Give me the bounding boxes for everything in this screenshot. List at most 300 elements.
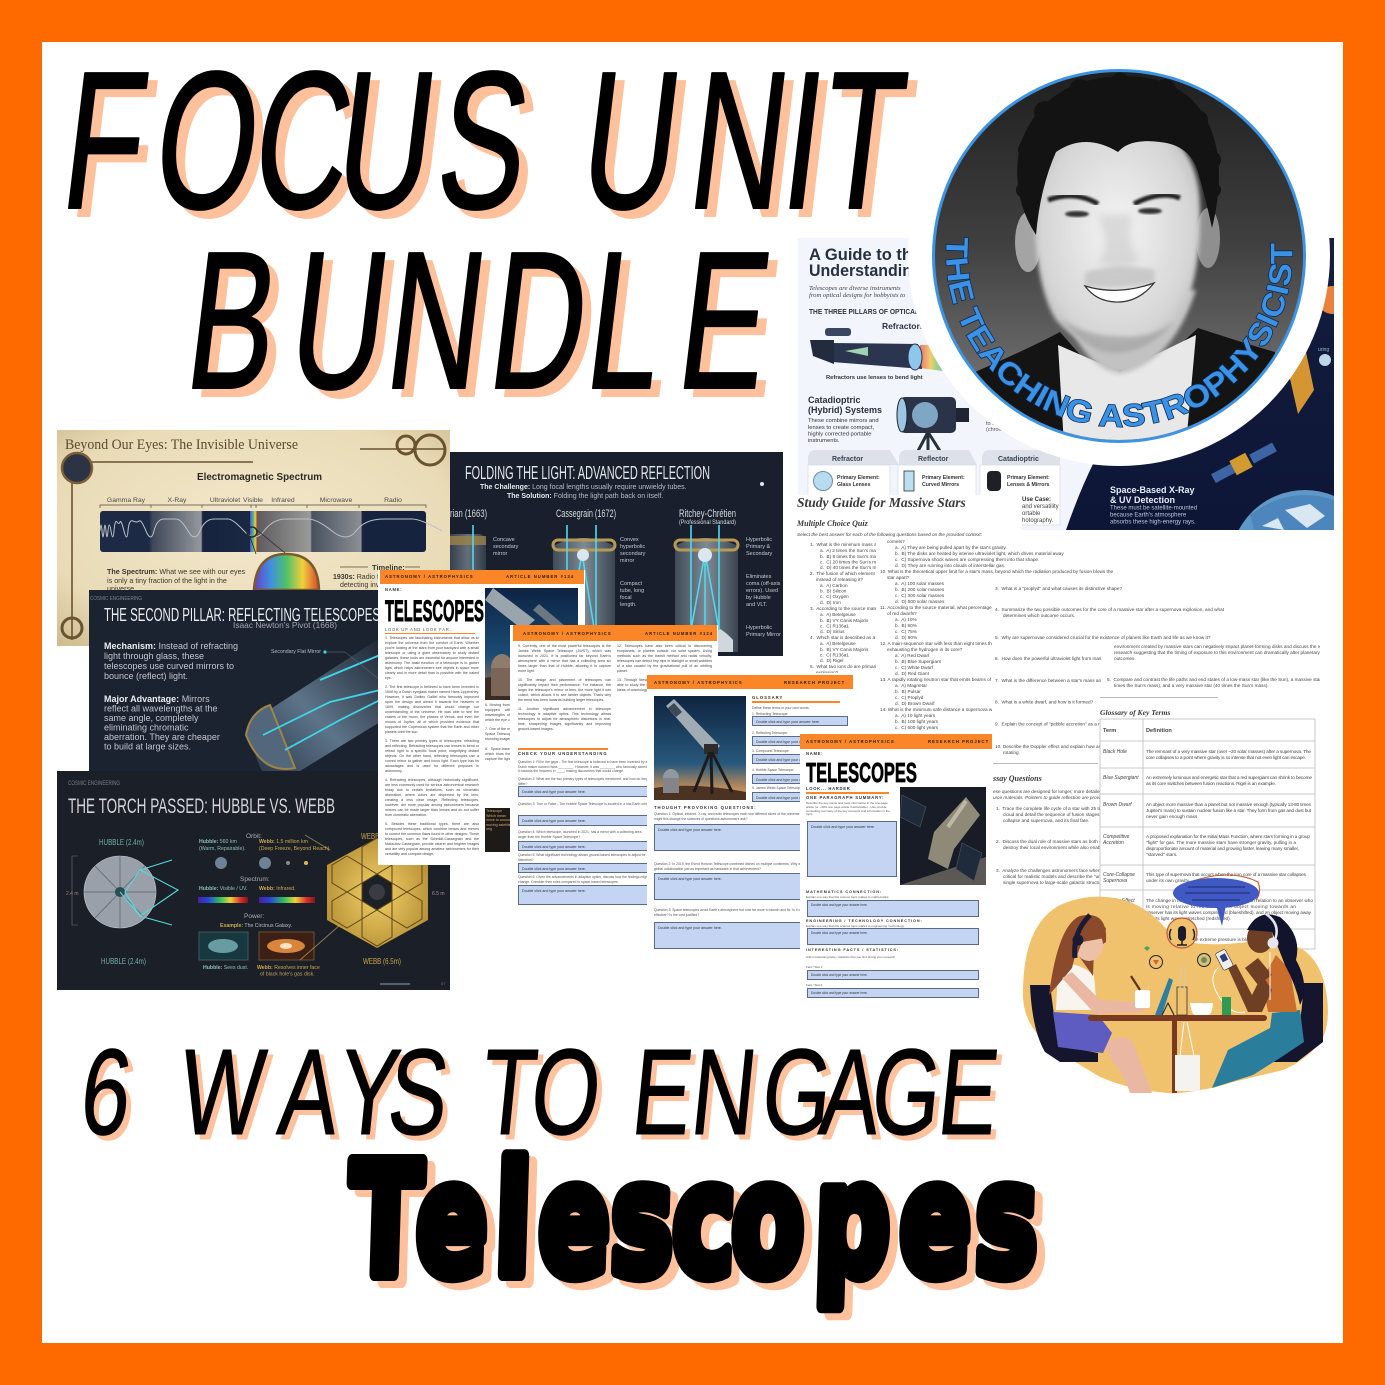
side text column: 6. Moving from the ground to space: telescopes are also equipped with instruments that detect different wavelengths of light, from radio waves to gamma rays, which the eye cannot see. [485, 703, 579, 722]
heading: 6 ways to engage telescopes: Telescopes [347, 1131, 1041, 1311]
question 5: Question 5: What significant technology allows ground-based telescopes to adjust for distortion? [518, 853, 646, 862]
short answer questions: 10. Describe the Doppler effect and explain how ast [995, 744, 1103, 749]
text block: space-based detection: because Earth's atmosphere [1110, 512, 1187, 518]
header bar [513, 625, 717, 641]
glossary table: "fight" for gas. The more massive stars have stronger gravity, pulling in a [1146, 840, 1296, 845]
icon: microphone [1167, 918, 1197, 948]
comparison tabs: hotography. [1022, 518, 1054, 524]
question 2: Question 2: In 2019, the Event Horizon Telescope combined dishes on multiple continents. Why was such global collaboration just as important as hardware in that achievement? [654, 862, 812, 871]
answer 3 [654, 922, 804, 949]
quiz column 2: c. C) 300 solar masses [895, 593, 945, 598]
answer 1: Double click and type your answer here. [658, 828, 722, 832]
orbit: Orbit: [246, 833, 262, 840]
article text: 2. The first telescope is believed to have been invented in 1608 by a Dutch eyeglass maker named Hans Lippershey. However, it was Galileo Galilei who famously improved upon the design and aimed it towards the heavens in 1609, making discoveries that would change our understanding of the universe. He was able to see the craters of the moon, the phases of Venus, and even the moons of Jupiter, all of which provided evidence that supported the Copernican system that the Earth and other planets orbit the sun. [385, 685, 479, 734]
comparison tabs: Glass Lenses [837, 482, 871, 488]
essay questions: ese questions are designed for longer, more detailed [993, 789, 1103, 794]
callouts: errors). Used [746, 588, 778, 594]
box 3 [752, 754, 848, 764]
short answer questions: 8. What is a white dwarf, and how is it formed? [995, 700, 1094, 704]
essay questions [992, 763, 1104, 885]
box 3: Double click and type your answer here. [756, 758, 820, 762]
facts heading: INTERESTING FACTS / STATISTICS: [806, 948, 899, 952]
background blob [1023, 897, 1328, 1093]
answer box 3: Double click and type your answer here. [522, 845, 586, 849]
quiz column 1: b. B) VY Canis Majoris [820, 647, 869, 652]
brows eyes [1048, 196, 1098, 204]
right chair [1257, 983, 1323, 1062]
comparison tabs: ortable [1022, 511, 1041, 517]
quiz column 2: 14. What is the minimum safe distance a supernova wou [880, 707, 998, 712]
right woman [1212, 914, 1304, 1088]
quiz column 1: 5. What two ions do are primarily res [810, 664, 888, 669]
quiz column 1: c. C) R136a1 [820, 652, 849, 658]
glossary table: This type of supernova that occurs when the iron core of a massive star collapses [1146, 872, 1307, 877]
term 1: 1. Refracting Telescope: [752, 712, 788, 716]
quiz column 1: a. A) 2 times the Sun's mass [820, 548, 881, 553]
comparison tabs: Primary Element: [837, 475, 880, 481]
hubble label top: HUBBLE (2.4m) [99, 837, 144, 847]
spectrum bar [100, 505, 442, 580]
header bar: ASTRONOMY / ASTROPHYSICS [806, 738, 895, 744]
captions: Webb: Resolves inner face [257, 965, 320, 971]
article column 1: 10. The design and placement of telescopes can significantly impact their performance. For instance, the larger the telescope's mirror or lens, the more light it can collect, which allows it to see fainter objects. That's why the trend has been towards building larger telescopes. [518, 678, 611, 702]
term 3: 3. Compound Telescope: [752, 749, 789, 753]
quiz column 2: c. C) Proplyd [895, 695, 924, 700]
comparison tabs: Lenses & Mirrors [1007, 482, 1049, 488]
text block: aberration. They are cheaper [104, 732, 220, 742]
essay questions: destroy their local environment while also enabli [1003, 845, 1103, 850]
dark callout box: Telescope Which mean move to around moving satellite orig [486, 809, 511, 831]
quiz column 1: d. D) Sirius [820, 629, 845, 634]
subtitle: LOOK UP AND LOOK FAR... [385, 627, 455, 632]
jacket [975, 328, 1275, 450]
power: Power: [244, 913, 264, 920]
quiz column 1: d. D) Iron [820, 600, 841, 605]
quiz column 1: b. B) Silicon [820, 588, 847, 594]
glossary table: never gain enough mass. [1146, 814, 1199, 819]
icon: catadioptric telescope [897, 397, 969, 451]
engineering box [807, 928, 979, 945]
text block: catadioptric [808, 395, 882, 444]
text block: bounce (reflect) light. [104, 671, 188, 681]
comparison tabs: Reflector [918, 456, 949, 463]
text block: space-based detection [1110, 485, 1197, 526]
photo: telescope at night [654, 696, 746, 800]
illustration: satellite and earth [1211, 352, 1380, 640]
subheading: Isaac Newton's Pivot (1668) [233, 620, 337, 630]
text block: guide heading: A Guide to th [809, 245, 912, 264]
header bar [380, 570, 584, 584]
essay questions: ssay Questions [992, 774, 1042, 783]
page progress: 07 [441, 981, 446, 986]
timeline [333, 563, 420, 589]
quiz column 2: a. A) Red Dwarf [895, 653, 930, 658]
quiz column 2: a. A) They are being pulled apart by the star's gravity. [895, 545, 1007, 550]
text block: catadioptric: These combine mirrors and [808, 418, 879, 424]
glossary table: An object more massive than a planet but not massive enough (typically 13-80 times [1146, 802, 1312, 807]
callouts: Hyperbolic [746, 537, 772, 543]
subheading: The Challenge: Long focal lengths usually require unwieldy tubes. [480, 484, 687, 491]
fact 1 label: Fact / Stat 1: [806, 965, 823, 969]
text: the teaching astrophysicist: THE TEACHING ASTROPHYSICIST [945, 237, 1293, 428]
captions: Hubble: Sees dust. [203, 965, 248, 971]
worksheet 4: research project summary [800, 733, 992, 1005]
essay questions: collapse and supernova, and its final fate. [1003, 818, 1089, 823]
text block: catadioptric: instruments. [808, 438, 840, 444]
timeline: detecting invisible [340, 582, 395, 589]
captions [203, 965, 320, 978]
spectrum labels [107, 497, 402, 504]
worksheet 3: research project glossary [647, 673, 853, 958]
glossary table: observer has its light waves compressed (blueshifted), and an object moving away [1146, 910, 1312, 915]
slide: torch passed [57, 771, 450, 990]
text block: guide heading [809, 245, 925, 331]
smile [1085, 283, 1154, 302]
article text [385, 636, 479, 856]
comparison tabs: and versatility [1022, 504, 1059, 510]
article text: 1. Telescopes are fascinating instruments that allow us to explore the universe from the comfort of Earth. Whether you're looking at the stars from your backyard with a small telescope or using a giant observatory to study distant galaxies, these tools are essential for anyone interested in astronomy. The basic function of a telescope is to gather light, which helps astronomers see objects in space more clearly and in more detail than is possible with the naked eye. [385, 636, 479, 680]
text block: catadioptric: highly corrected portable [808, 432, 871, 438]
photo: space telescope [900, 787, 986, 885]
orbit: Hubble: 560 km [199, 839, 237, 845]
left woman [1049, 915, 1152, 1093]
header bar: RESEARCH PROJECT [928, 738, 989, 744]
callouts: hyperbolic [620, 544, 645, 550]
essay questions: 3. Analyze the challenges astronomers face when [996, 868, 1101, 873]
quiz column 2: 13. A rapidly rotating neutron star that emits beams of X [880, 677, 996, 682]
article text: 4. Refracting telescopes, although historically significant, are less commonly used for serious astronomical research today due to certain limitations, such as chromatic aberration, where colors are dispersed by the lens, creating a less clear image. Reflecting telescopes, however, are more popular among astronomers because mirrors can be made larger than lenses and do not suffer from chromatic aberration. [385, 778, 479, 817]
callouts: and VLT. [746, 602, 768, 608]
subtitle: LOOK... HARDER [806, 786, 850, 791]
column headings: (Professional Standard) [679, 520, 736, 526]
photo: telescope at dusk [485, 588, 578, 700]
answer box 4 [518, 863, 653, 873]
text block: space-based detection: absorbs these high-energy rays. [1110, 520, 1196, 526]
heading: 6 ways to engage telescopes: Telescopes [355, 1138, 1049, 1318]
quiz column 2: 11. According to the source material, what percentage o [880, 605, 996, 610]
infographic: guide to telescopes [798, 238, 1334, 530]
glossary table: The change in frequency or wavelength of a wave in relation to an observer who [1146, 898, 1313, 903]
quiz column 2: d. D) They are running into clouds of interstellar gas. [895, 563, 1005, 568]
quiz column 2: exhausting the hydrogen in its core? [887, 647, 963, 652]
orbit: (Deep Freeze, Beyond Reach). [259, 846, 331, 852]
title: focus unit bundle: BUNDLE [177, 212, 781, 430]
summary box [807, 821, 897, 877]
mask between columns [876, 538, 1322, 738]
quiz column 2: b. B) 50% [895, 623, 917, 628]
header bar [800, 734, 992, 748]
term 4: 4. Hubble Space Telescope: [752, 768, 794, 772]
quiz column 2: a. A) Magnetar [895, 683, 927, 688]
term 2: 2. Reflecting Telescope: [752, 730, 788, 734]
box 5: Double click and type your answer here. [756, 796, 820, 800]
header bar [647, 675, 853, 689]
quiz column 2: d. D) Red Giant [895, 671, 930, 676]
column headings: Cassegrain (1672) [556, 508, 616, 520]
spectrum labels: Radio [384, 497, 402, 504]
callouts: focal [620, 595, 632, 601]
question 4: Question 4: Which telescope, launched in 2021, has a mirror with a collecting area larger than the Hubble Space Telescope? [518, 830, 641, 839]
summary instructions: Describe the key points and most information in the one-page article (or ~30% one page article if achievable) - Use provide compelling summary of the key concepts and information in the topic. [806, 801, 890, 816]
glossary table: Definition [1146, 728, 1172, 734]
callouts: Primary Mirror [746, 632, 781, 638]
glossary table: An extremely luminous and energetic star that a red supergiant can shrink to become [1146, 775, 1312, 780]
article column 1: 9. Currently, one of the most powerful telescopes is the James Webb Space Telescope (JWST), which was launched in 2021. It is positioned far beyond Earth's atmosphere with a mirror that has a collecting area six times larger than that of Hubble, allowing it to capture more light. [518, 644, 611, 673]
question five line: 5. Why are supernovae considered crucial for the existence of planets like Earth and life as we know it? [995, 635, 1211, 640]
glossary table: The remnant of a very massive star (over ~20 solar masses) after a supernova. The [1146, 749, 1311, 754]
heading: 6 ways to engage telescopes [75, 1023, 1049, 1320]
essay questions: single supernova to large-scale galactic structu [1003, 880, 1101, 885]
thought provoking heading: THOUGHT PROVOKING QUESTIONS: [654, 805, 757, 810]
infographic: guide to telescopes: to c [986, 421, 995, 427]
short answer questions: rotating. [1003, 750, 1020, 755]
short answer questions: 7. What is the difference between a star's mass an [995, 678, 1101, 683]
header bar: ASTRONOMY / ASTROPHYSICS [523, 630, 612, 636]
glossary table: Term [1103, 728, 1116, 734]
engineering heading: ENGINEERING / TECHNOLOGY CONNECTION: [806, 919, 923, 923]
glossary table: under its own gravity. [1146, 878, 1190, 883]
article column 1 [518, 644, 611, 731]
orbit: Webb: 1.5 million km [259, 839, 308, 845]
callouts: mirror [620, 558, 635, 564]
quiz column 1: b. B) 8 times the Sun's mass [820, 554, 881, 559]
header bar: ARTICLE NUMBER #134 [506, 574, 574, 579]
answer box 5: Double click and type your answer here. [522, 889, 586, 893]
quiz column 2: d. D) 90% [895, 635, 917, 640]
label: COSMIC ENGINEERING [68, 781, 120, 787]
callouts: secondary [493, 544, 519, 550]
callouts: Convex [620, 537, 639, 543]
box 2: Double click and type your answer here. [756, 740, 820, 744]
heading: glossary: Glossary of Key Terms [1100, 708, 1170, 717]
summary box: Double click and type your answer here. [811, 825, 875, 829]
answer box 5 [518, 885, 653, 905]
comparison tabs: Refractor [832, 456, 863, 463]
icons: reactions [1144, 946, 1210, 968]
text: the spectrum [107, 567, 246, 593]
study guide page [796, 495, 1320, 950]
fact 1 box: Double click and type your answer here. [811, 973, 868, 977]
box 2 [752, 736, 848, 746]
text block: Mechanism: Instead of refracting [104, 641, 238, 651]
answer 3: Double click and type your answer here. [658, 926, 722, 930]
answer 2: Double click and type your answer here. [658, 877, 722, 881]
column headings: rian (1663) [450, 508, 487, 520]
text block [104, 641, 238, 752]
power [220, 913, 292, 929]
text: the spectrum: universe. [107, 584, 136, 593]
short answer questions: 6. How does the powerful ultraviolet light from mas [995, 656, 1102, 661]
galaxy images [199, 932, 314, 960]
quiz column 2: b. B) 200 solar masses [895, 587, 945, 592]
diagram: webb mirror: 6.5 m [432, 891, 445, 897]
slide: second pillar [89, 590, 380, 771]
math instruction: Explain one way that this science topic relates to mathematics. [806, 895, 889, 899]
title: TELESCOPES [385, 595, 484, 628]
webb label top: WEBB (6.5m) [361, 832, 399, 841]
mask for right columns [992, 586, 1322, 806]
text block: space-based detection: These must be satellite-mounted [1110, 506, 1197, 512]
quiz column 1: instead of releasing it? [816, 577, 863, 582]
quiz column 1: explosion? [816, 670, 839, 675]
callouts: Concave [493, 537, 515, 543]
essay questions right column: research suggesting that the timing of exposure to this environment can dramatically alter planetary [1114, 650, 1320, 655]
glossary table [1100, 719, 1315, 949]
quiz column 2: a. A) 10 light years [895, 713, 936, 718]
spectrum labels: Gamma Ray [107, 497, 146, 504]
glossary table: has its light waves stretched (redshifted). [1146, 916, 1231, 921]
question 2 and answer box: Question 2: What are the two primary types of telescopes mentioned, and how do they differ? [518, 777, 648, 786]
callouts: mirror [493, 551, 508, 557]
slide: folding the light [450, 452, 783, 656]
header bar: ARTICLE NUMBER #124 [645, 630, 713, 636]
accent rule [806, 792, 889, 794]
math box: Double click and type your answer here. [811, 903, 868, 907]
spectrum [198, 876, 315, 903]
timeline: Timeline: [372, 563, 405, 572]
quiz column 1: d. D) Rigel [820, 658, 843, 663]
question 3: Question 3: True or False - The Hubble Space Telescope is located in a low-Earth orbit. [518, 802, 649, 806]
short answer questions: 9. Explain the concept of "pebble accretion" as a n [995, 722, 1101, 726]
quiz column 1: a. A) Betelgeuse [820, 612, 856, 617]
callouts: by Hubble [746, 595, 771, 601]
text block: space-based detection: Space-Based X-Ray [1110, 485, 1195, 495]
quiz column 1: 4. Which star is described as a red [810, 635, 884, 640]
title: focus unit bundle [53, 32, 925, 430]
quiz column 2: b. B) Pulsar [895, 689, 921, 694]
side text column: 8. Space-based telescopes avoid Earth's atmosphere, which blurs the images seen from the ground, and they capture the light that does not reach the surface. [485, 747, 579, 761]
quiz column 1: c. C) R136a1 [820, 624, 849, 628]
short answer questions: determines which outcome occurs. [1003, 613, 1075, 618]
title: TELESCOPES [806, 757, 917, 788]
diagrams [450, 525, 738, 652]
column headings: Ritchey-Chrétien [679, 508, 736, 520]
quiz column 2: star apart? [887, 575, 910, 580]
glossary table: Brown Dwarf [1103, 802, 1132, 808]
spectrum labels: Visible [243, 497, 263, 504]
answer box 2 [518, 815, 653, 826]
essay questions right column: times the Sun's mass), and a very massive star (40 times the Sun's mass). [1114, 683, 1269, 688]
heading: Beyond Our Eyes: The Invisible Universe [65, 437, 298, 453]
essay questions: urce materials. Pointers to guide reflection are provid [993, 795, 1103, 800]
box 1 [752, 716, 848, 726]
article column 2: 12. Telescopes have also been critical in discovering exoplanets, or planets outside our solar system. Using methods such as the transit method and radial velocity, telescopes can detect tiny dips in starlight or small wobbles of a star caused by the gravitational pull of an orbiting planet. [617, 644, 712, 673]
questions: Question 1: Fill in the gaps - The first telescope is believed to have been invented by a Dutch maker named Hans ________. However, it was ________ who famously aimed it towards the heavens in ____, making discoveries that would change [518, 760, 647, 773]
text block: catadioptric: lenses to create compact, [808, 425, 874, 431]
glossary table: disproportionate amount of material and growing faster, leaving many smaller, [1146, 846, 1299, 851]
hair [1016, 73, 1221, 235]
orbit: (Warm, Repairable). [199, 846, 246, 852]
summary heading: ONE PARAGRAPH SUMMARY: [806, 795, 884, 800]
glossary table: as its core switches between fusion reactions. Rigel is an example. [1146, 781, 1276, 786]
quiz column 2: c. C) White Dwarf [895, 665, 934, 670]
illustration: two women listening to a podcast [1023, 874, 1328, 1094]
quiz column 2: of red dwarfs? [887, 611, 917, 616]
short answer questions: 4. Summarize the two possible outcomes for the core of a massive star after a supernova explosion, and what [995, 607, 1225, 612]
quiz column 2: comets? [887, 539, 905, 544]
section heading: CHECK YOUR UNDERSTANDING [518, 751, 608, 756]
glossary table: A proposed explanation for the Initial Mass Function, where stars forming in a group [1146, 834, 1310, 839]
text block: reflect all wavelengths at the [104, 704, 218, 714]
icon: refractor telescope [810, 328, 950, 372]
glossary table: Core-Collapse [1103, 872, 1135, 878]
power: Example: The Circinus Galaxy. [220, 923, 292, 929]
glossary table: core collapses to a point where gravity is so intense that not even light can escape. [1146, 755, 1306, 760]
worksheet 2: check your understanding [510, 625, 718, 910]
comparison tabs: Use Case: [1022, 497, 1051, 503]
fact 2 label: Fact / Stat 2: [806, 983, 823, 987]
glossary table: "starved" stars. [1146, 852, 1177, 857]
caption: refractors: Refractors use lenses to bend light [826, 375, 923, 381]
text block: telescopes use curved mirrors to [104, 661, 234, 671]
callouts: Primary & [746, 544, 770, 550]
quiz column 1 [810, 542, 888, 675]
text: the spectrum: is only a tiny fraction of the light in the [107, 576, 227, 585]
glossary heading: GLOSSARY [752, 695, 783, 700]
callouts: coma (off-axis [746, 581, 781, 587]
heading: multiple choice: Multiple Choice Quiz [796, 519, 869, 528]
text block: to build at large sizes. [104, 742, 191, 752]
box 5 [752, 792, 848, 802]
glossary instruction: Define these terms in your own words. [752, 706, 810, 710]
slide: beyond our eyes [57, 430, 450, 646]
portrait badge [908, 69, 1330, 466]
text: the spectrum: The Spectrum: What we see with our eyes [107, 567, 246, 576]
glossary table: A massive star where the extreme pressure is blown from the [1146, 937, 1273, 942]
accent rule [752, 701, 840, 702]
quiz column 1: a. A) Betelgeuse [820, 641, 856, 646]
fact 2 box: Double click and type your answer here. [811, 991, 868, 995]
quiz column 1: a. A) Carbon [820, 583, 848, 588]
text block: guide heading: Telescopes are diverse instruments [809, 285, 901, 292]
dark callout box [485, 808, 512, 852]
quiz column 2: c. C) 75% [895, 629, 917, 634]
question 1: Question 1: Optical, infrared, X-ray, and radio telescopes each see different slices of the universe. How might this change the sciences of questions astronomers ask? [654, 812, 808, 821]
essay questions: cloud and detail the sequence of fusion stages a [1003, 812, 1104, 817]
glossary table: Doppler Effect [1103, 898, 1135, 904]
spectrum labels: Microwave [320, 497, 352, 504]
text block: same angle, completely [104, 713, 199, 723]
callouts: Eliminates [746, 574, 772, 580]
accent rule [518, 748, 608, 750]
fact 2 box [807, 988, 979, 998]
callouts: length. [620, 602, 637, 608]
comparison tabs: Curved Mirrors [922, 482, 959, 488]
captions: of black hole's gas disk. [260, 972, 315, 978]
engineering instruction: Explain one way that this science topic relates to engineering / technology. [806, 924, 905, 928]
glossary table: Blue Supergiant [1103, 775, 1139, 781]
glossary table: Accretion [1102, 840, 1124, 846]
comparison tabs [808, 450, 1060, 525]
quiz column 2: 12. A main-sequence star with less than eight times the [880, 641, 995, 646]
text block: light through glass, these [104, 651, 204, 661]
subheading: The Solution: Folding the light path back on itself. [507, 493, 663, 500]
hubble label bottom: HUBBLE (2.4m) [101, 956, 146, 966]
text block: guide heading: Refractors [882, 321, 925, 331]
column headings [450, 508, 736, 526]
text block: guide heading: from optical designs for hobbyists to [809, 292, 906, 299]
quiz column 1: b. B) VY Canis Majoris [820, 618, 869, 623]
article column 1: 11. Another significant advancement in telescope technology is adaptive optics. This technology allows telescopes to adjust for atmospheric distortions in real-time, sharpening images significantly and improving ground-based images. [518, 707, 611, 731]
quiz column 2: c. C) Supernova shock waves are compressing them into that shape. [895, 557, 1039, 562]
article column 2: 13. Through these observations, researchers have been able to study the stars, and dark matter and fundamental ideas of cosmology. [617, 678, 712, 692]
name label: NAME: [806, 751, 823, 756]
name label: NAME: [385, 587, 402, 592]
quiz column 1: c. C) Oxygen [820, 594, 849, 599]
instructions: Select the best answer for each of the following questions based on the provided context: [797, 532, 983, 537]
table [1088, 965, 1267, 1093]
article text: 3. There are two primary types of telescopes: refracting and reflecting. Refracting telescopes use lenses to bend or refract light to a specific focal point, magnifying distant objects. On the other hand, reflecting telescopes use a curved mirror to gather and focus light. Each type has its advantages and is used for different purposes in astronomy. [385, 739, 479, 773]
